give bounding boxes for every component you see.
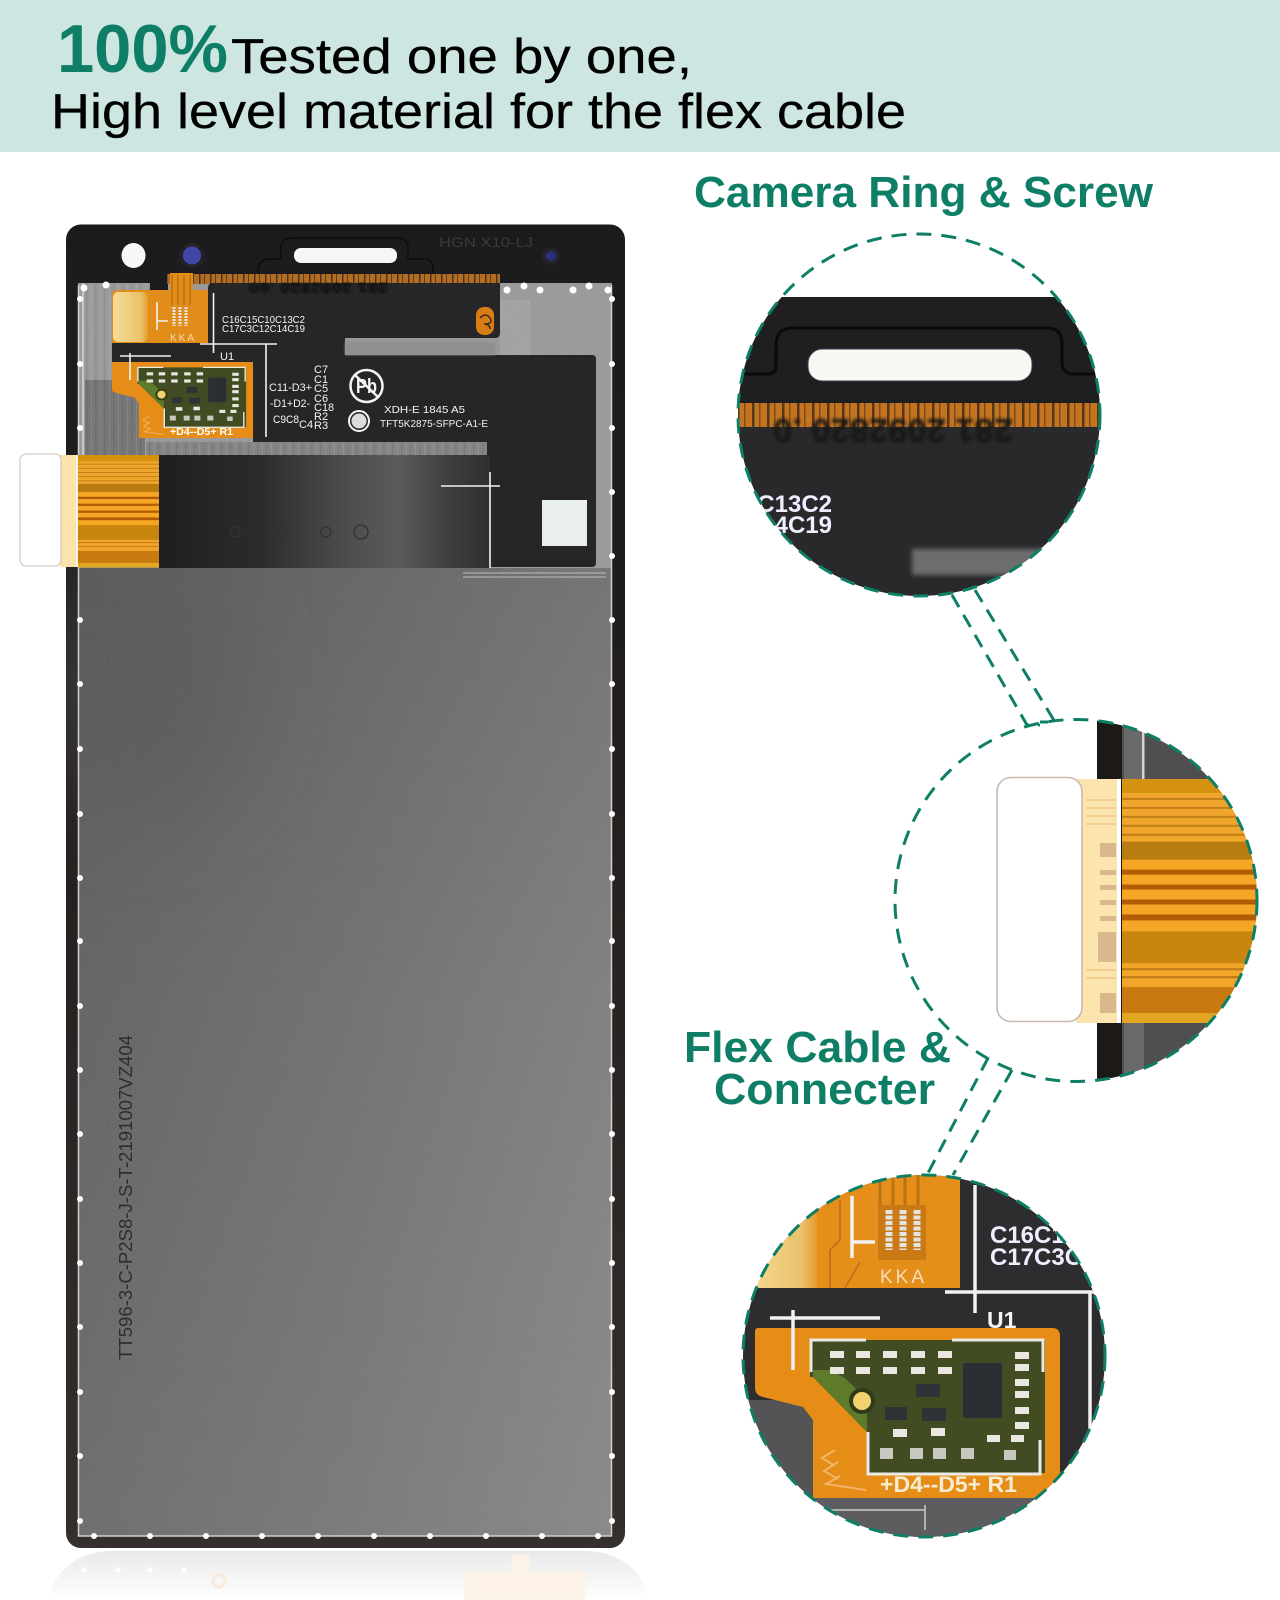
phone frame: [66, 224, 625, 1548]
silkscreen labels: R3: [314, 420, 328, 432]
plate edge lines: [78, 285, 612, 1536]
orange strip: [738, 403, 1100, 427]
silkscreen lines: [120, 293, 277, 437]
orange flex area: [757, 1175, 960, 1288]
circle: circuit board detail: U1: [987, 1307, 1017, 1333]
silkscreen labels: C4: [299, 419, 313, 431]
KKA marking: KKA: [880, 1267, 927, 1288]
heading: camera ring and screw: Camera Ring & Screw: [694, 168, 1154, 217]
mirrored print: 281 2092820 .0: [773, 412, 1013, 449]
heading: flex cable and connecter: Flex Cable &: [684, 1023, 951, 1072]
circle: camera ring and screw detail: C14C19: [744, 512, 832, 539]
heading: high level material: High level material for the flex cable: [51, 85, 906, 139]
silkscreen labels: R2: [314, 411, 328, 423]
circuit board: [755, 1328, 1060, 1498]
silver back plate: [79, 568, 611, 1536]
silkscreen labels: C1: [314, 374, 328, 386]
gray mottling: [66, 568, 159, 804]
icon: orange oval pad: [476, 307, 494, 335]
icon: small sensor: [542, 247, 560, 265]
perimeter dots: [77, 282, 615, 1539]
circle: circuit board detail: C17C3C12: [990, 1244, 1109, 1271]
silkscreen labels: +D4--D5+ R1: [170, 427, 233, 438]
lower black film: [159, 455, 587, 568]
silkscreen labels: U1: [220, 351, 234, 363]
white label square: [542, 500, 587, 546]
printed serial number: TT596-3-C-P2S8-J-S-T-2191007VZ404: [116, 1035, 136, 1360]
heading: 100%: 100%: [57, 11, 228, 87]
gray silver plate: [748, 1400, 823, 1506]
speaker slot: [808, 349, 1032, 381]
silkscreen labels: -D1+D2-: [270, 398, 310, 410]
icon: lead-free symbol: [350, 370, 382, 402]
connector tab: [20, 454, 78, 567]
cream connector strip: [1076, 779, 1120, 1023]
silkscreen labels: C18: [314, 402, 334, 414]
connector dashes: top circle to middle circle: [952, 590, 1055, 725]
flex cable: [78, 455, 159, 567]
header band: [0, 0, 1280, 152]
silkscreen labels: TFT5K2875-SFPC-A1-E: [380, 418, 488, 430]
silver strip between films: [345, 342, 495, 355]
silkscreen labels: C7: [314, 364, 328, 376]
notch outline: [738, 328, 1100, 374]
silkscreen labels: C11-D3+: [269, 382, 312, 394]
silkscreen labels: C6: [314, 393, 328, 405]
circle: circuit board detail: [743, 1170, 1109, 1537]
circuit board: [112, 362, 253, 438]
speaker slot: [294, 248, 397, 263]
silkscreen labels: C9C8: [273, 414, 299, 426]
silkscreen labels: C16C15: [990, 1222, 1078, 1249]
silkscreen labels: [170, 314, 488, 438]
black film shape: [112, 283, 596, 567]
orange cable bands: [1122, 779, 1262, 1023]
icon: round white marker: [349, 411, 369, 431]
silkscreen labels: XDH-E 1845 A5: [384, 404, 465, 416]
frame marking text: HGN X10-LJ: [439, 234, 533, 250]
heading: flex cable and connecter: Connecter: [714, 1065, 935, 1114]
solder pads: [889, 1210, 917, 1250]
earpiece notch outline: [258, 238, 433, 280]
silkscreen labels: C17C3C12C14C19: [222, 323, 305, 335]
phone screen back: [20, 224, 625, 1548]
heading: tested one by one: Tested one by one,: [231, 30, 692, 84]
icon: front camera hole: [122, 243, 146, 268]
silkscreen labels: C16C15C10C13C2: [222, 314, 305, 326]
white connector tab: [997, 778, 1082, 1022]
circle: camera ring and screw detail: [738, 234, 1100, 597]
phone reflection: [49, 1551, 648, 1600]
silkscreen lines: [770, 1185, 1105, 1430]
connector dashes: middle circle to bottom circle: [927, 1058, 1012, 1175]
KKA marking: KKA: [170, 333, 196, 344]
icon: lead-free symbol: Pb: [356, 376, 377, 398]
icon: blue sensor: [179, 242, 205, 268]
silkscreen text: 0C13C2: [744, 491, 832, 518]
mirrored print: 281 2092820 .60: [249, 280, 388, 296]
silkscreen labels: C5: [314, 383, 328, 395]
orange flex with connector: [112, 273, 208, 344]
heading: flex cable and connecter: [684, 1023, 951, 1114]
top orange flex strip: [167, 274, 500, 284]
silver smear: [912, 549, 1082, 575]
circle: flex cable and connector detail: [895, 715, 1262, 1085]
circle: circuit board detail: +D4--D5+ R1: [880, 1472, 1017, 1497]
